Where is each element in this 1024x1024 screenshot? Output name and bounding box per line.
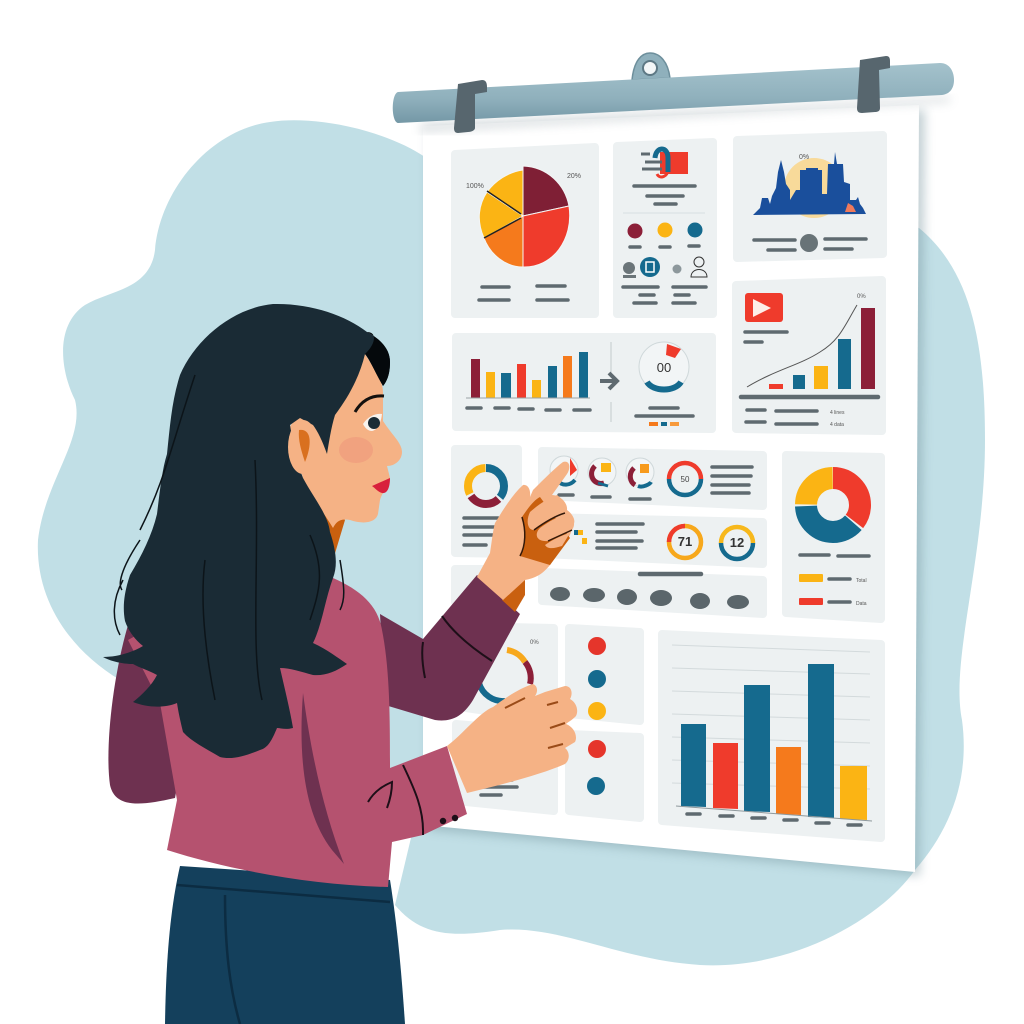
lower hand [447, 684, 577, 793]
panel: arc donut [466, 626, 554, 721]
hook [632, 53, 670, 80]
legend yellow [799, 574, 867, 584]
sweater shadow fold [302, 693, 344, 864]
header icon [641, 149, 688, 177]
dot labels [630, 246, 699, 247]
pie legend lines [479, 286, 568, 300]
dots [587, 740, 606, 795]
panel: pill icons [542, 572, 763, 614]
score ring 12 [721, 527, 753, 559]
heading lines [634, 186, 695, 204]
legend text 2: 4 data [830, 422, 844, 428]
panel: lower dots [569, 734, 640, 818]
legend yellow: Total [856, 578, 867, 584]
panel: left stub [455, 569, 516, 602]
title line [640, 572, 701, 576]
panel: score rings [542, 517, 763, 564]
face [288, 354, 402, 528]
neck [303, 478, 345, 560]
pill icons [550, 587, 749, 609]
caption lines [754, 239, 866, 250]
dot icons [628, 222, 702, 238]
legend red [799, 598, 867, 607]
poster sheet [423, 105, 919, 872]
panel: small donut [455, 449, 518, 554]
gauge [639, 342, 689, 392]
person [103, 304, 577, 1024]
hair strands [114, 375, 344, 700]
lips [372, 478, 390, 493]
icon labels [623, 287, 706, 303]
rod bar [393, 63, 954, 123]
sun glow [784, 158, 844, 218]
ring gauge [669, 463, 701, 495]
gauge legend [649, 422, 679, 426]
mini donut 3 [626, 458, 654, 487]
small icons [574, 530, 587, 544]
score ring 71 [669, 526, 701, 558]
gauge caption [636, 408, 693, 416]
bars [769, 308, 875, 389]
panel: skyline [737, 135, 883, 258]
panel: pie chart [455, 147, 595, 314]
mini donut 1 [550, 456, 578, 485]
people icons [623, 257, 707, 278]
panel: large bar chart [662, 634, 881, 838]
dots [588, 637, 606, 720]
legend red: Data [856, 601, 867, 607]
axis bar [741, 395, 878, 399]
panel: ring row [542, 451, 763, 506]
city skyline [753, 152, 866, 215]
pointing hand [477, 462, 574, 612]
text lines [559, 467, 752, 499]
sweater body [128, 578, 467, 887]
mini donut 2 [588, 458, 616, 486]
bars [681, 664, 867, 820]
legend text: 4 lines [830, 410, 845, 416]
trousers [165, 866, 405, 1024]
cuff buttons [440, 815, 458, 824]
score ring 71: 71 [678, 534, 692, 549]
poster shadow [428, 110, 925, 876]
sleeve details [368, 765, 423, 835]
ear [288, 420, 318, 474]
right clip [857, 56, 890, 113]
bar labels [467, 408, 590, 410]
axis labels [687, 814, 861, 825]
panel: lower left text [456, 724, 554, 811]
play icon [745, 293, 783, 322]
eye [363, 414, 382, 431]
eyebrow [355, 396, 384, 412]
pie label right: 20% [567, 173, 581, 180]
chart label: 0% [857, 294, 866, 300]
hanging rod [393, 53, 954, 133]
donut label: 0% [530, 640, 539, 646]
arrow [600, 373, 617, 389]
score ring 12: 12 [730, 535, 744, 550]
text lines [597, 524, 643, 548]
back arm sleeve [108, 625, 205, 804]
arc donut [479, 650, 531, 701]
trouser waistband and seam [177, 885, 390, 1024]
cheek [339, 437, 373, 463]
background blob [38, 120, 985, 965]
donut [806, 478, 860, 532]
skyline label: 0% [799, 154, 809, 161]
left clip [454, 80, 487, 133]
pie chart [479, 166, 570, 267]
caption lines [800, 555, 869, 556]
panel: icons [617, 142, 713, 314]
legend lines [746, 410, 817, 424]
caption icon [800, 234, 818, 252]
skyline accent [845, 203, 856, 212]
bar chart [466, 352, 590, 398]
arm details [422, 616, 492, 678]
panel: dot list [569, 628, 640, 721]
pie label left: 100% [466, 183, 484, 190]
rod shadow [420, 97, 950, 132]
upper arm sleeve [380, 575, 520, 720]
panel: growth chart [736, 280, 882, 431]
hair black fringe [365, 332, 390, 386]
donut [468, 468, 504, 504]
text lines [480, 780, 517, 795]
panel: legend donut [786, 455, 881, 619]
title lines [745, 332, 787, 342]
trend curve [747, 305, 857, 387]
gauge: 00 [657, 360, 671, 375]
text lines [464, 518, 498, 545]
ring gauge: 50 [681, 475, 690, 484]
panel: bar chart and gauge [456, 337, 712, 429]
hair [103, 304, 390, 758]
